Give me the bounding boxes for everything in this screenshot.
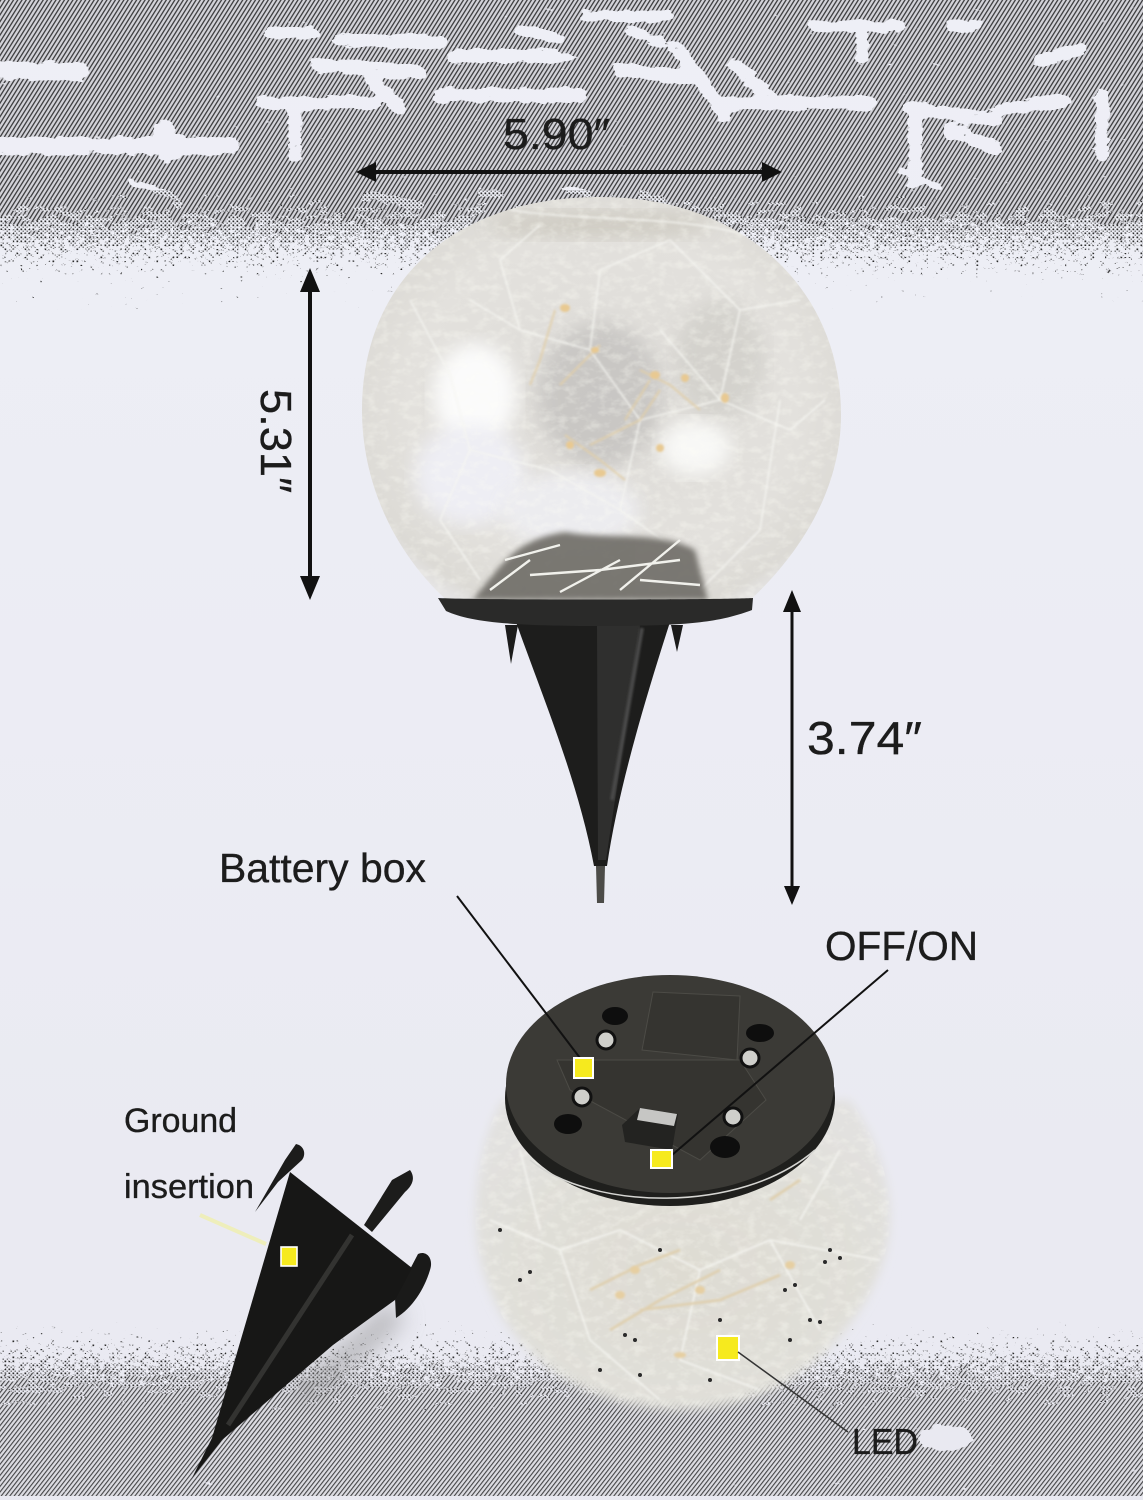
label: ground insertion bbox=[124, 1102, 266, 1244]
label: LED: LED bbox=[852, 1421, 918, 1462]
screws bbox=[573, 1031, 759, 1126]
LED marker bbox=[717, 1336, 739, 1360]
mounting holes bbox=[554, 1007, 774, 1158]
label: off/on switch bbox=[651, 923, 978, 1168]
label: battery box bbox=[219, 845, 593, 1078]
power switch bbox=[622, 1108, 678, 1150]
dimension: width 5.90 in: 5.90″ bbox=[503, 110, 610, 159]
glass bowl bbox=[460, 1090, 900, 1420]
label: LED bbox=[738, 1352, 918, 1462]
ground insertion stake bbox=[192, 1144, 431, 1478]
label: ground insertion: insertion bbox=[124, 1168, 254, 1206]
label: off/on switch: OFF/ON bbox=[825, 923, 978, 969]
stake spike bbox=[505, 622, 683, 903]
dimension: width 5.90 in bbox=[356, 110, 782, 182]
dimension: height 5.31 in: 5.31″ bbox=[251, 389, 300, 493]
crackle glass globe bbox=[355, 190, 850, 610]
base disc bbox=[438, 598, 753, 626]
battery disc underside bbox=[505, 975, 835, 1206]
upside-down lamp showing underside bbox=[460, 975, 900, 1420]
label: battery box: Battery box bbox=[219, 845, 426, 891]
label: ground insertion: Ground bbox=[124, 1102, 237, 1140]
dimension: stake 3.74 in: 3.74″ bbox=[807, 712, 922, 764]
dimension: height 5.31 in bbox=[251, 268, 320, 600]
dimension: stake 3.74 in bbox=[783, 590, 922, 905]
inner dark base seen through glass bbox=[472, 532, 708, 600]
marker bbox=[281, 1247, 297, 1266]
globe solar light on stake bbox=[355, 190, 850, 903]
